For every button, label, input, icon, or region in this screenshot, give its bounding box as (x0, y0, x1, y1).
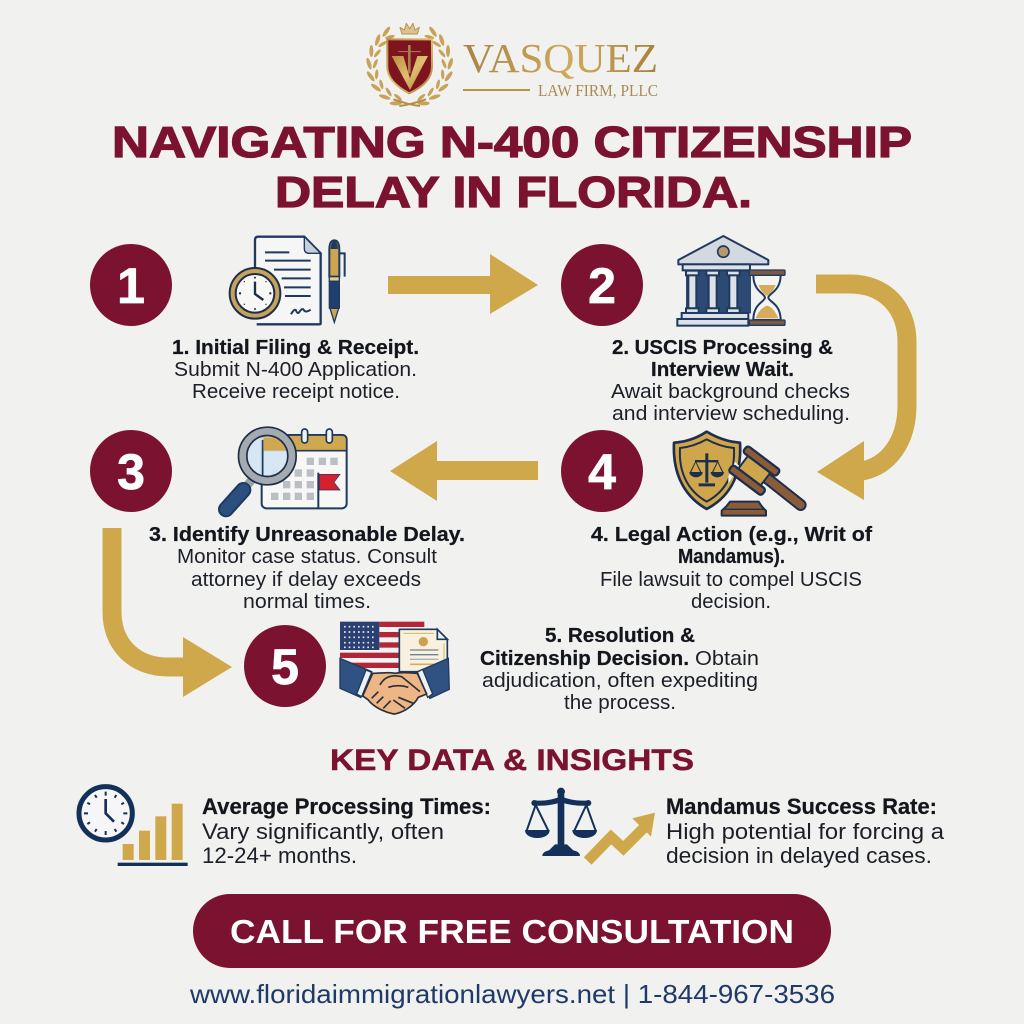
badge: step 4: 4 (588, 444, 616, 500)
text: step 5 (480, 625, 759, 714)
icon: flag, certificate and handshake (340, 622, 449, 714)
text: step 5: 5. Resolution & (545, 625, 695, 647)
title (112, 118, 912, 217)
text: average processing times: Average Processing Times: (202, 794, 491, 819)
text: average processing times: 12-24+ months. (202, 843, 357, 868)
badge: step 3 (90, 430, 172, 512)
text: step 1: Receive receipt notice. (192, 381, 400, 403)
icon: magnifier over calendar with flag (226, 429, 347, 509)
badge: step 5 (244, 625, 326, 707)
text: step 1 (172, 337, 419, 403)
text: step 3: attorney if delay exceeds (191, 569, 421, 591)
text: step 3: normal times. (243, 591, 371, 613)
icon: document, clock and pen (230, 237, 345, 324)
text: mandamus success rate (666, 794, 945, 868)
text: step 2: 2. USCIS Processing & (612, 337, 833, 359)
text: average processing times: Vary significantly, often (202, 819, 444, 844)
text: step 2: and interview scheduling. (612, 403, 850, 425)
call to action button: CALL FOR FREE CONSULTATION (230, 913, 794, 950)
text: mandamus success rate: High potential for forcing a (666, 819, 945, 844)
text: step 4: decision. (691, 591, 771, 613)
title: NAVIGATING N-400 CITIZENSHIP (112, 118, 912, 167)
badge: step 5: 5 (271, 639, 299, 695)
text: step 1: Submit N-400 Application. (174, 359, 417, 381)
arrow: step 3 to step 5 (112, 528, 232, 697)
text: step 5: Citizenship Decision. (480, 648, 689, 670)
contact line: www.floridaimmigrationlawyers.net | 1-844-967-3536 (189, 979, 835, 1009)
arrow: step 2 to step 4 (816, 284, 907, 500)
text: step 1: 1. Initial Filing & Receipt. (172, 337, 419, 359)
text: step 3 (149, 524, 465, 613)
text: step 3: Monitor case status. Consult (177, 546, 437, 568)
text: step 5: adjudication, often expediting (482, 670, 758, 692)
text: step 4: File lawsuit to compel USCIS (600, 569, 862, 591)
icon: clock and bar chart (79, 787, 188, 866)
text: step 2 (611, 337, 850, 425)
icon: courthouse and hourglass (677, 236, 785, 326)
text: step 2: Interview Wait. (651, 359, 794, 381)
heading: key data and insights: KEY DATA & INSIGHTS (330, 744, 694, 777)
text: step 3: 3. Identify Unreasonable Delay. (149, 524, 465, 546)
text: step 2: Await background checks (611, 381, 850, 403)
text: step 4: 4. Legal Action (e.g., Writ of (591, 524, 872, 546)
text: step 5: Obtain (695, 648, 759, 670)
icon: shield and gavel (674, 432, 801, 516)
text: mandamus success rate: decision in delayed cases. (666, 843, 932, 868)
logo subtitle: LAW FIRM, PLLC (538, 81, 658, 100)
badge: step 1: 1 (117, 258, 145, 314)
badge: step 4 (561, 430, 643, 512)
text: average processing times (202, 794, 491, 868)
badge: step 2: 2 (588, 258, 616, 314)
logo: Vasquez Law Firm (365, 23, 658, 106)
arrow: step 4 to step 3 (390, 441, 538, 501)
text: step 4: Mandamus). (678, 546, 785, 568)
icon: scales and rising arrow (525, 788, 655, 861)
text: mandamus success rate: Mandamus Success Rate: (666, 794, 937, 819)
badge: step 2 (561, 244, 643, 326)
badge: step 3: 3 (117, 444, 145, 500)
arrow: step 1 to step 2 (388, 254, 538, 314)
call to action button (193, 894, 831, 968)
title: DELAY IN FLORIDA. (275, 168, 752, 217)
badge: step 1 (90, 244, 172, 326)
icon: laurel wreath and crest (365, 23, 454, 106)
text: step 5: the process. (564, 692, 676, 714)
text: step 4 (591, 524, 872, 613)
logo wordmark: VASQUEZ (463, 35, 658, 81)
